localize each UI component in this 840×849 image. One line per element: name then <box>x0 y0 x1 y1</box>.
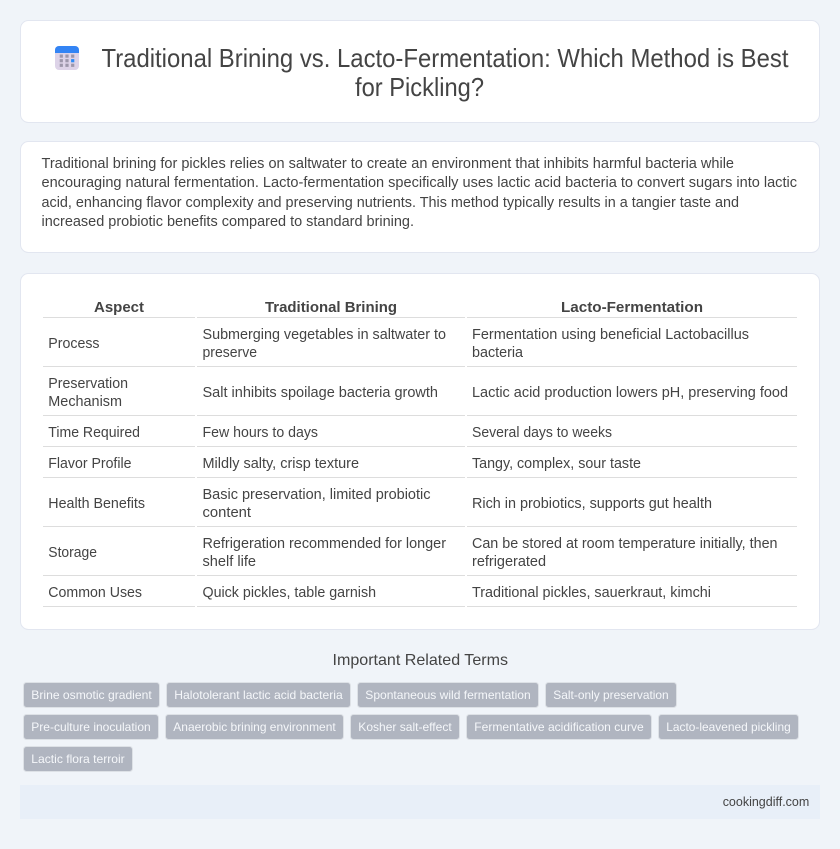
table row: process: bacteria <box>472 345 523 361</box>
table row: storage <box>43 536 797 576</box>
table row: time required <box>43 425 797 447</box>
tag: kosher salt-effect <box>350 714 460 740</box>
footer <box>20 785 820 819</box>
table row: time required: Few hours to days <box>202 425 318 441</box>
panel: important related terms <box>24 652 798 772</box>
table header <box>43 299 797 318</box>
table row: process: Fermentation using beneficial Lactobacillus <box>472 327 749 343</box>
table row: storage: Can be stored at room temperature initially, then <box>472 536 778 552</box>
tag: lactic flora terroir <box>24 746 132 772</box>
table header: Traditional Brining <box>265 299 397 316</box>
table row: common uses: Common Uses <box>48 585 142 601</box>
table row: health benefits <box>43 487 797 527</box>
text block: introduction paragraph: encouraging natural fermentation. Lacto-fermentation specifically uses lactic acid bacteria to convert sugars into lactic <box>42 175 797 191</box>
text block: introduction paragraph: acid, enhancing flavor complexity and preserving nutrients. This method typically results in a tangier taste and <box>42 195 739 211</box>
table header: Aspect <box>94 299 144 316</box>
panel: title card <box>20 20 820 122</box>
tag: salt-only preservation <box>546 682 676 708</box>
table row: common uses: Quick pickles, table garnish <box>202 585 376 601</box>
title: Traditional Brining vs. Lacto-Fermentation: Which Method is Best <box>102 45 788 73</box>
table row: preservation mechanism: Mechanism <box>48 394 122 410</box>
table row: flavor profile: Mildly salty, crisp texture <box>202 456 359 472</box>
table row: process: preserve <box>202 345 257 361</box>
footer source text: cookingdiff.com <box>723 794 809 809</box>
tag: brine osmotic gradient: Brine osmotic gradient <box>31 688 152 702</box>
text block: introduction paragraph: increased probiotic benefits compared to standard brining. <box>42 214 414 230</box>
title: for Pickling? <box>355 74 484 102</box>
table row: health benefits: Health Benefits <box>48 496 145 512</box>
tag: pre-culture inoculation: Pre-culture inoculation <box>31 720 151 734</box>
table header: Lacto-Fermentation <box>561 299 703 316</box>
tag: spontaneous wild fermentation: Spontaneous wild fermentation <box>365 688 531 702</box>
tag: spontaneous wild fermentation <box>358 682 538 708</box>
table row: preservation mechanism: Preservation <box>48 376 128 392</box>
tag: kosher salt-effect: Kosher salt-effect <box>358 720 452 734</box>
table row: storage: Storage <box>48 545 97 561</box>
tag: fermentative acidification curve: Fermentative acidification curve <box>474 720 644 734</box>
tag: anaerobic brining environment: Anaerobic brining environment <box>173 720 336 734</box>
table row: health benefits: Rich in probiotics, supports gut health <box>472 496 712 512</box>
tag: lacto-leavened pickling: Lacto-leavened pickling <box>666 720 791 734</box>
tag: fermentative acidification curve <box>466 714 652 740</box>
tag: halotolerant lactic acid bacteria: Halotolerant lactic acid bacteria <box>174 688 343 702</box>
title <box>102 45 788 102</box>
table row: storage: Refrigeration recommended for longer <box>202 536 446 552</box>
table row: preservation mechanism: Lactic acid production lowers pH, preserving food <box>472 385 788 401</box>
table row: time required: Time Required <box>48 425 140 441</box>
tag: salt-only preservation: Salt-only preservation <box>553 688 669 702</box>
tag: anaerobic brining environment <box>166 714 344 740</box>
table row: common uses <box>43 585 797 607</box>
panel: introduction <box>20 142 820 252</box>
table row: preservation mechanism: Salt inhibits spoilage bacteria growth <box>202 385 438 401</box>
tag: lactic flora terroir: Lactic flora terroir <box>31 752 125 766</box>
table row: storage: shelf life <box>202 554 256 570</box>
table row: process: Submerging vegetables in saltwater to <box>202 327 446 343</box>
icon: calendar <box>55 46 79 70</box>
text block: introduction paragraph: Traditional brining for pickles relies on saltwater to create an environment that inhibits harmful bacteria while <box>42 156 734 172</box>
table row: flavor profile: Flavor Profile <box>48 456 131 472</box>
table row: health benefits: content <box>202 505 251 521</box>
table row: time required: Several days to weeks <box>472 425 612 441</box>
tag: lacto-leavened pickling <box>658 714 798 740</box>
table row: health benefits: Basic preservation, limited probiotic <box>202 487 430 503</box>
panel: comparison table <box>20 274 820 630</box>
table row: flavor profile <box>43 456 797 478</box>
table row: storage: refrigerated <box>472 554 546 570</box>
tag: pre-culture inoculation <box>24 714 158 740</box>
tag: halotolerant lactic acid bacteria <box>166 682 350 708</box>
heading: important related terms: Important Related Terms <box>332 652 508 669</box>
table row: process: Process <box>48 336 100 352</box>
table row: process <box>43 327 797 367</box>
table row: common uses: Traditional pickles, sauerkraut, kimchi <box>472 585 711 601</box>
tag: brine osmotic gradient <box>24 682 160 708</box>
text block: introduction paragraph <box>42 156 797 230</box>
table row: preservation mechanism <box>43 376 797 416</box>
table row: flavor profile: Tangy, complex, sour taste <box>472 456 641 472</box>
